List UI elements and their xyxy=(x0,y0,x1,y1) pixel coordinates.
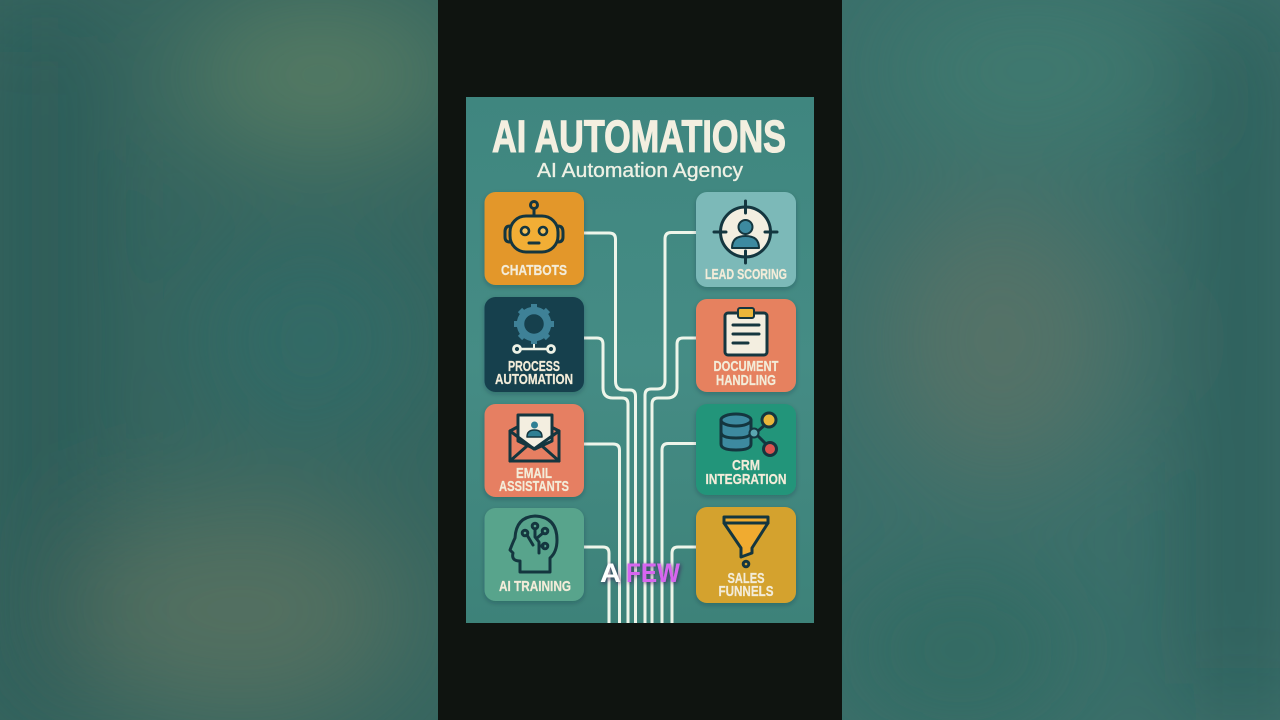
card: document handling xyxy=(696,299,796,392)
subtitle: AI Automation Agency xyxy=(537,160,743,182)
black video column xyxy=(438,0,842,720)
icon: gear and nodes xyxy=(514,304,554,352)
card: email assistants: ASSISTANTS xyxy=(499,478,569,495)
poster panel xyxy=(466,97,814,623)
label: document handling: DOCUMENT xyxy=(714,358,778,375)
card: document handling: HANDLING xyxy=(716,372,776,389)
connector lines xyxy=(584,232,696,623)
card: crm integration: INTEGRATION xyxy=(706,471,786,488)
card: ai training xyxy=(484,508,584,601)
icon: brain head xyxy=(510,516,557,572)
caption: a few xyxy=(600,558,680,588)
label: lead scoring: LEAD SCORING xyxy=(705,266,787,283)
card: sales funnels: FUNNELS xyxy=(718,583,774,600)
card: process automation xyxy=(484,297,584,392)
label: sales funnels: SALES xyxy=(728,570,764,587)
label: email assistants: EMAIL xyxy=(516,465,552,482)
icon: clipboard xyxy=(725,308,767,355)
label: process automation: PROCESS xyxy=(508,358,560,375)
card: chatbots xyxy=(484,192,584,285)
icon: robot xyxy=(505,202,563,252)
card: process automation: AUTOMATION xyxy=(495,371,573,388)
icon: database with nodes xyxy=(721,413,776,456)
blurred background: right xyxy=(842,0,1280,720)
caption: a few: FEW xyxy=(626,558,680,588)
title: AI AUTOMATIONS xyxy=(492,111,786,162)
icon: envelope xyxy=(510,415,559,461)
caption: a few: A xyxy=(600,558,621,588)
icon: target with person xyxy=(714,201,777,263)
label: crm integration: CRM xyxy=(732,457,760,474)
label: ai training: AI TRAINING xyxy=(499,578,571,595)
icon: funnel xyxy=(724,517,768,567)
card: lead scoring xyxy=(696,192,796,287)
card: crm integration xyxy=(696,404,796,495)
card: email assistants xyxy=(484,404,584,497)
card: sales funnels xyxy=(696,507,796,603)
label: chatbots: CHATBOTS xyxy=(501,262,567,279)
blurred background: left xyxy=(0,0,460,720)
